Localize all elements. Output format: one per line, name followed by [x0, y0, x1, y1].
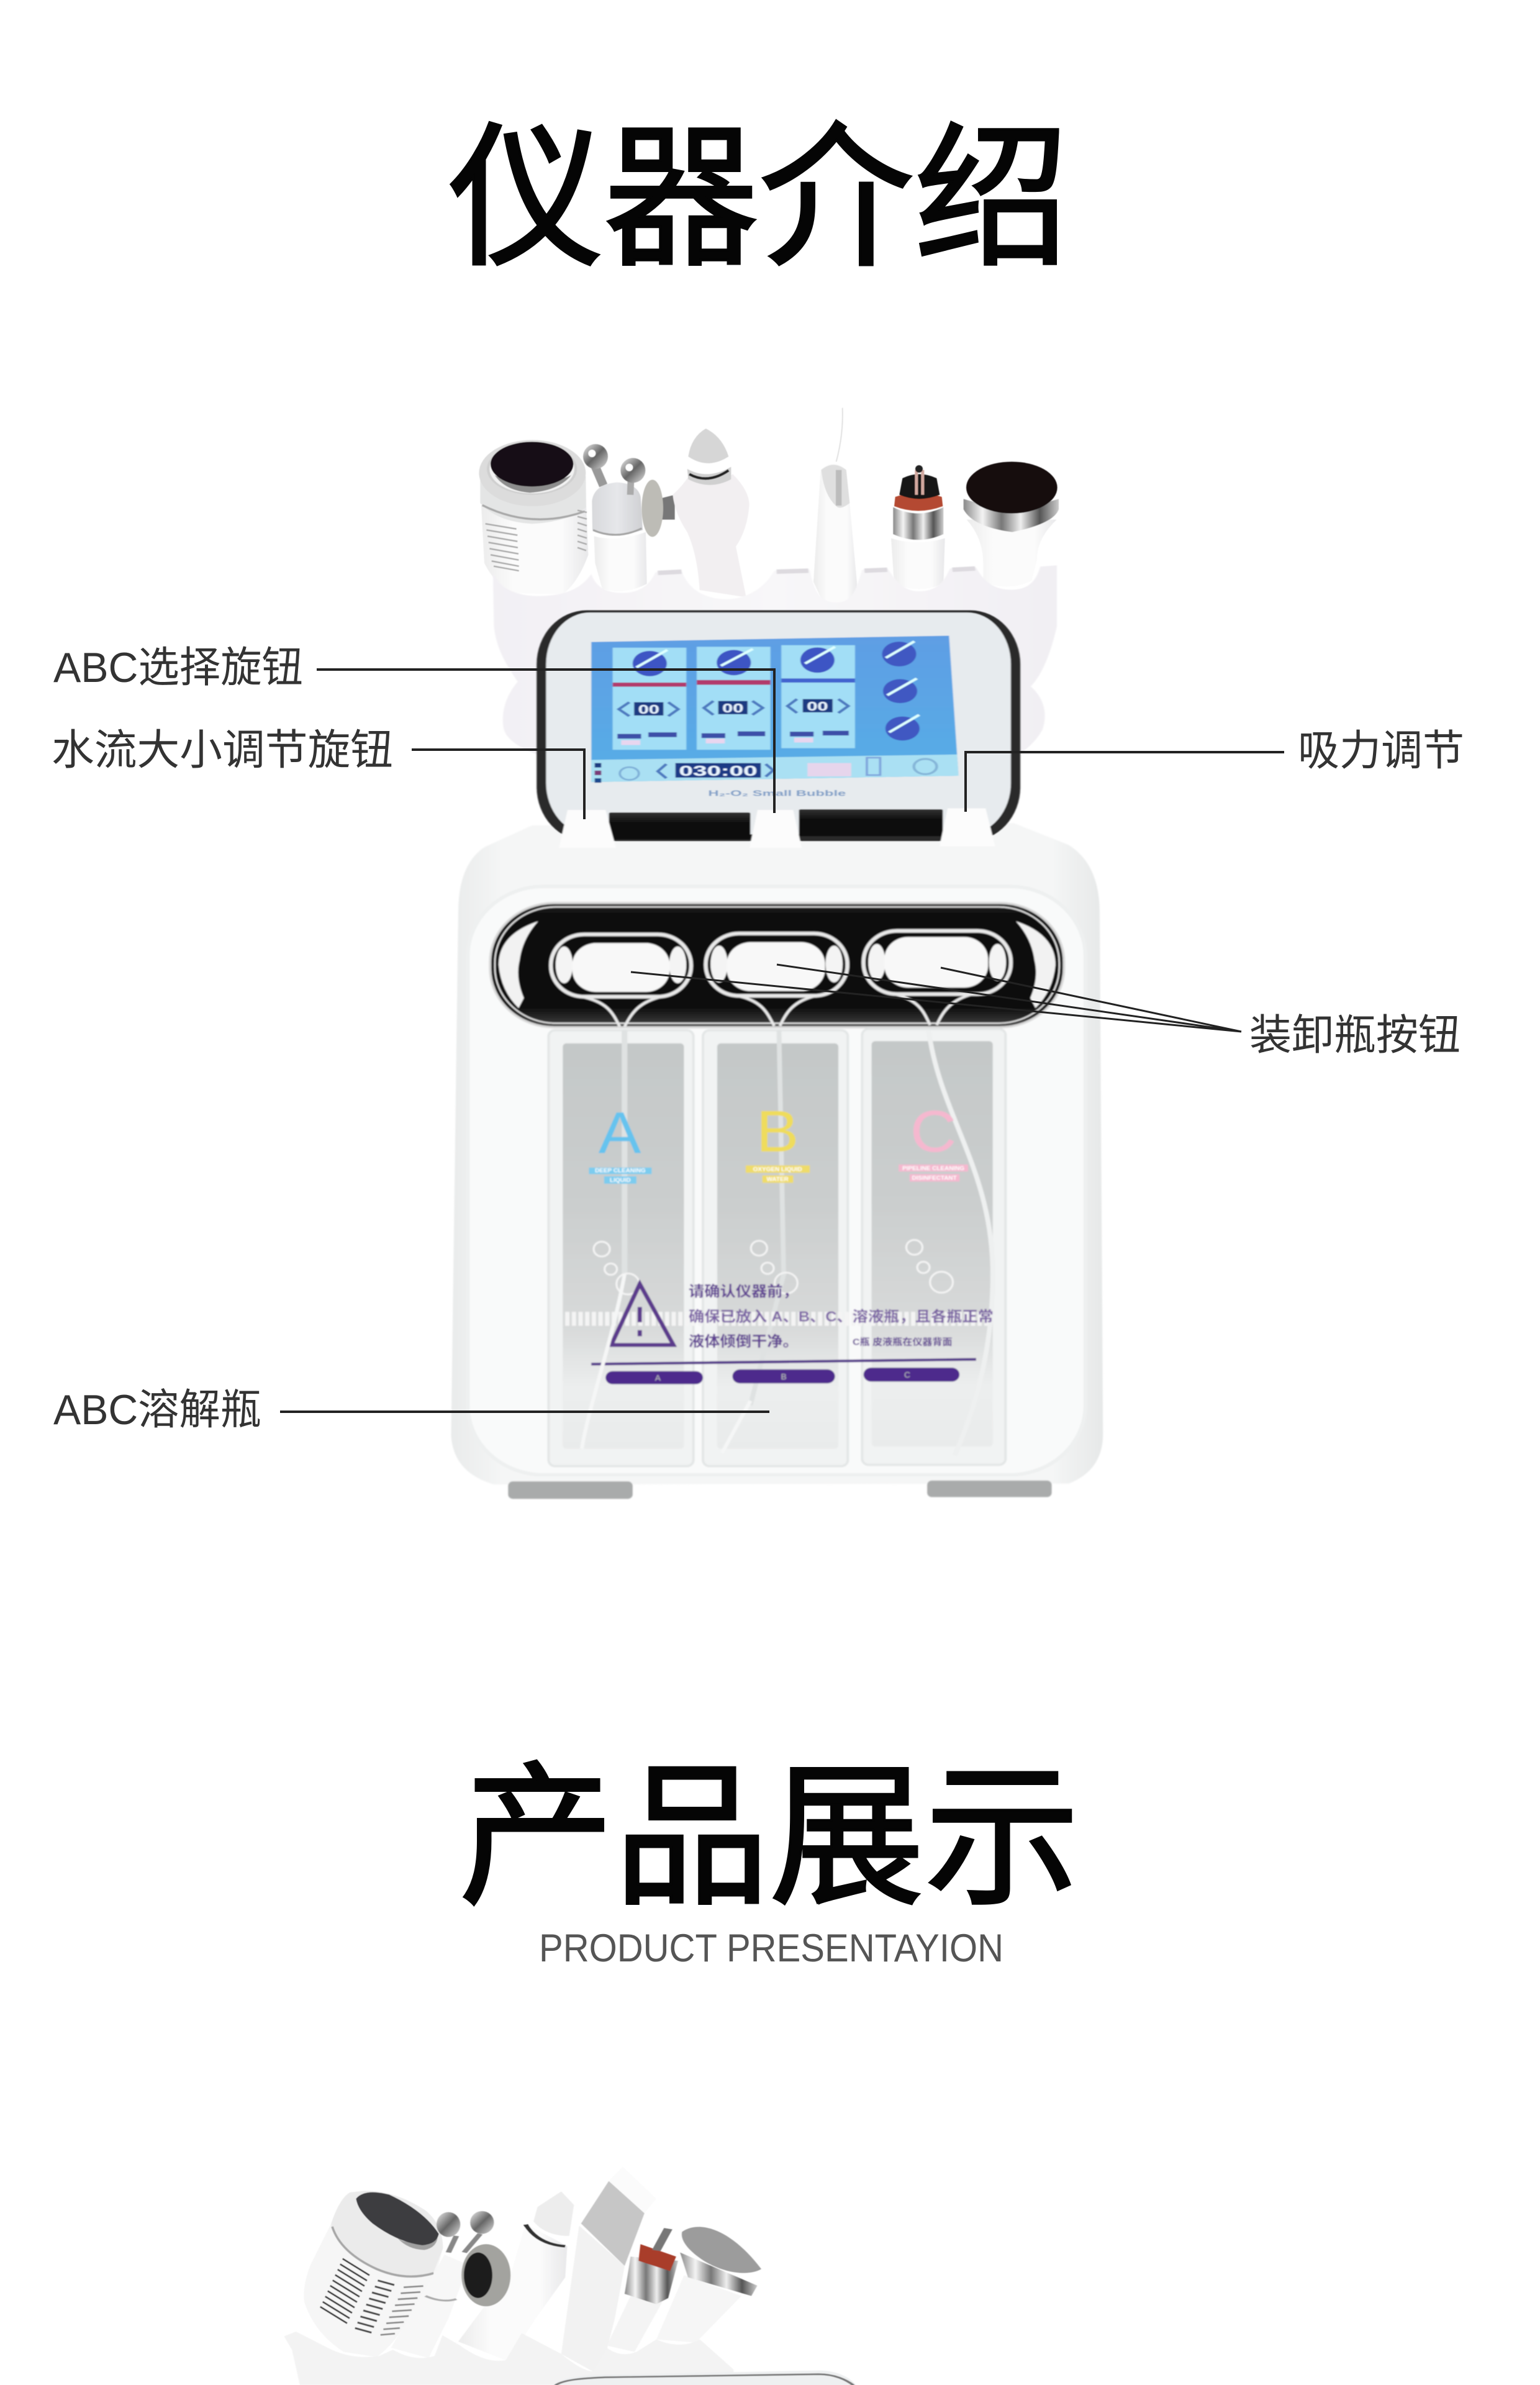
screen top edge [553, 2371, 856, 2385]
bottle A [548, 1030, 694, 1466]
purple rule and labels: A [655, 1374, 661, 1383]
callout: 水流大小调节旋钮: 水流大小调节旋钮 [52, 727, 393, 774]
callout: ABC选择旋钮 [53, 644, 774, 813]
callout: 吸力调节 [966, 727, 1464, 812]
left handpieces [479, 429, 750, 597]
handpiece 2: twin-ball roller [583, 444, 647, 591]
LCD timer [595, 758, 936, 783]
main body with bottles [451, 823, 1103, 1499]
adjustment knobs [559, 809, 995, 848]
bottle B: WATER [767, 1176, 789, 1183]
purple rule and labels: B [781, 1372, 787, 1381]
title: 仪器介绍: 仪器介绍 [448, 112, 1069, 285]
subtitle: PRODUCT PRESENTAYION [539, 1927, 1003, 1970]
callout: ABC选择旋钮: ABC选择旋钮 [53, 644, 303, 691]
inner frame [468, 886, 1085, 1475]
callout: 吸力调节: 吸力调节 [1298, 727, 1464, 775]
bottle release buttons [551, 931, 1011, 1027]
LCD timer: 030:00 [679, 763, 758, 779]
tubes [582, 1274, 751, 1453]
product photo: angled device top [284, 2166, 856, 2385]
LCD channel cards [613, 645, 855, 750]
angled handpiece: bulb with disc [458, 2191, 574, 2361]
warning triangle [611, 1284, 674, 1345]
bottle B: OXYGEN LIQUID [753, 1166, 802, 1173]
bottle A: DEEP CLEANING [595, 1168, 646, 1174]
handpiece 1: black-top probe [479, 440, 588, 594]
angled handpiece: twin-ball roller [391, 2211, 494, 2358]
feet [508, 1481, 1052, 1499]
black control bar [490, 903, 1064, 1027]
right handpieces [813, 408, 1059, 604]
angled handpiece: chrome electrode [607, 2228, 678, 2352]
purple rule and labels [591, 1360, 976, 1384]
angled handpiece: black-top probe [304, 2191, 443, 2357]
angled handpiece: large disc probe [656, 2227, 761, 2343]
body shell [451, 823, 1103, 1484]
purple warning text [689, 1284, 994, 1350]
bottle B: B [756, 1099, 799, 1165]
purple warning text: C瓶 皮液瓶在仪器背面 [853, 1336, 953, 1347]
control panel [537, 611, 1020, 848]
holder tray [493, 565, 1057, 756]
screen housing [537, 611, 1020, 841]
purple warning text: 确保已放入 A、B、C、溶液瓶，且各瓶正常 [689, 1309, 994, 1325]
bottle A: A [599, 1101, 641, 1166]
heading: 产品展示: 产品展示 [459, 1751, 1080, 1924]
bottle C: PIPELINE CLEANING [902, 1165, 964, 1172]
angled handpiece: ultrasonic blade [561, 2166, 656, 2371]
bottle A: LIQUID [610, 1177, 631, 1184]
LCD screen [591, 635, 959, 782]
LCD channel values: 00 [638, 702, 659, 717]
LCD bottom strip [591, 755, 959, 782]
callout: 装卸瓶按钮 [631, 965, 1461, 1059]
bottle C [862, 1029, 1005, 1465]
LCD channel values [617, 699, 849, 745]
bottle B [703, 1030, 848, 1466]
LCD channel values: 00 [807, 699, 828, 714]
purple rule and labels: C [904, 1371, 910, 1379]
black slots under screen [609, 809, 943, 840]
LCD side mode icons [882, 642, 920, 740]
dotted band [565, 1309, 990, 1329]
handpiece 3: bulb with disc and cone tip [641, 429, 750, 597]
bottle C: C [910, 1099, 956, 1165]
purple warning text: 液体倾倒干净。 [689, 1334, 799, 1350]
device illustration: instrument front view [52, 408, 1464, 1499]
bottle C: DISINFECTANT [912, 1175, 957, 1181]
handpiece 4: ultrasonic wand [813, 408, 858, 604]
handpiece 6: large black disc probe [964, 461, 1059, 587]
callout: ABC溶解瓶: ABC溶解瓶 [53, 1386, 261, 1433]
handpiece 5: chrome electrode [891, 465, 945, 589]
angled tray [284, 2332, 733, 2385]
LCD channel values: 00 [722, 701, 743, 716]
purple warning text: 请确认仪器前， [689, 1284, 799, 1300]
callout: 装卸瓶按钮: 装卸瓶按钮 [1249, 1012, 1461, 1059]
callout: 水流大小调节旋钮 [52, 727, 584, 819]
brand text: H₂-O₂ Small Bubble [708, 789, 846, 798]
